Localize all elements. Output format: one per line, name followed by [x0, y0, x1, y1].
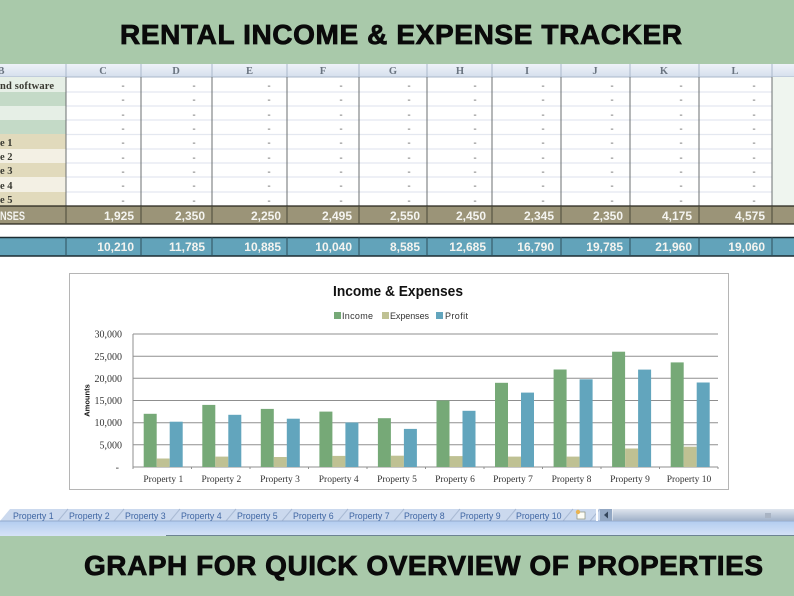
column headers: K: [660, 66, 669, 77]
x axis labels: Property 4: [319, 475, 359, 485]
column headers: I: [525, 66, 529, 77]
row label column: e 1: [0, 138, 13, 149]
chart legend: [334, 311, 468, 321]
sheet tab strip: Property 3: [125, 511, 166, 521]
profit row: 11,785: [169, 240, 205, 254]
column headers: L: [731, 66, 739, 77]
x axis labels: Property 8: [552, 475, 592, 485]
row label column: e 5: [0, 195, 13, 206]
total expenses row: [0, 206, 794, 224]
profit row: 19,785: [586, 240, 623, 254]
column headers: E: [246, 66, 253, 77]
profit bars: [170, 370, 710, 467]
spreadsheet table: [0, 64, 794, 256]
y axis title: Amounts: [82, 384, 92, 417]
x axis labels: Property 2: [201, 475, 242, 485]
y axis labels: 25,000: [94, 352, 122, 363]
sheet tab strip: Property 6: [293, 511, 334, 521]
data cells with dashes: ----------: [121, 110, 756, 121]
y axis labels: -: [116, 462, 119, 474]
chart: income and expenses: [70, 274, 728, 490]
expense bars: [157, 447, 697, 467]
scrollbar: [596, 509, 794, 521]
y axis labels: 15,000: [94, 396, 122, 407]
column headers: F: [320, 66, 326, 77]
x axis labels: Property 7: [493, 475, 533, 485]
data cells with dashes: [66, 77, 772, 207]
total expenses row: 2,250: [251, 209, 281, 223]
data cells with dashes: ----------: [121, 196, 756, 207]
profit row: 19,060: [728, 240, 765, 254]
total expenses row: 2,350: [175, 209, 205, 223]
profit row: 10,210: [97, 240, 134, 254]
profit row: 10,040: [315, 240, 352, 254]
x axis labels: Property 1: [143, 475, 183, 485]
chart legend: Profit: [445, 311, 468, 321]
chart title: Income & Expenses: [333, 283, 463, 300]
sheet tab strip: Property 9: [460, 511, 501, 521]
top title band: [0, 0, 794, 64]
income bars: [144, 352, 684, 467]
profit row: 12,685: [449, 240, 486, 254]
column headers: G: [389, 66, 397, 77]
y axis labels: 30,000: [94, 330, 122, 340]
column headers: C: [99, 66, 107, 77]
top title band: RENTAL INCOME & EXPENSE TRACKER: [120, 19, 682, 50]
total expenses row: 2,350: [593, 209, 623, 223]
total expenses row: 2,345: [524, 209, 554, 223]
row label column: e 3: [0, 166, 13, 177]
x axis labels: Property 6: [435, 475, 475, 485]
sheet tab strip: Property 4: [181, 511, 222, 521]
row label column: [0, 77, 66, 206]
y axis labels: 10,000: [94, 418, 122, 429]
sheet tab strip: Property 8: [404, 511, 445, 521]
bottom caption band: [0, 536, 794, 596]
bottom caption band: GRAPH FOR QUICK OVERVIEW OF PROPERTIES: [84, 550, 763, 581]
sheet tab strip: Property 10: [516, 511, 562, 521]
x axis labels: Property 10: [667, 475, 712, 485]
right side pale column: [772, 77, 794, 206]
row label column: nd software: [0, 81, 54, 92]
x axis labels: Property 5: [377, 475, 417, 485]
x axis labels: Property 9: [610, 475, 650, 485]
data cells with dashes: ----------: [121, 81, 756, 92]
data cells with dashes: ----------: [121, 95, 756, 106]
total expenses row: 2,450: [456, 209, 486, 223]
row label column: e 2: [0, 152, 13, 163]
chart legend: Income: [342, 311, 373, 321]
column headers: J: [592, 66, 598, 77]
row label column: e 4: [0, 181, 13, 192]
total expenses row: 2,550: [390, 209, 420, 223]
y axis labels: [94, 330, 122, 474]
data cells with dashes: ----------: [121, 167, 756, 178]
sheet tab strip: Property 2: [69, 511, 110, 521]
sheet tab strip: Property 1: [13, 511, 54, 521]
total expenses row: 4,575: [735, 209, 765, 223]
data cells with dashes: ----------: [121, 138, 756, 149]
y axis labels: 5,000: [100, 440, 122, 452]
total expenses row: 4,175: [662, 209, 692, 223]
total expenses row: 1,925: [104, 209, 134, 223]
column headers: D: [172, 66, 180, 77]
column headers: [0, 64, 794, 77]
column headers: H: [456, 66, 464, 77]
data cells with dashes: ----------: [121, 124, 756, 135]
data cells with dashes: ----------: [121, 181, 756, 192]
sheet tab strip: Property 7: [349, 511, 390, 521]
sheet tab strip: [0, 509, 794, 536]
sheet tab strip: Property 5: [237, 511, 278, 521]
y axis labels: 20,000: [94, 374, 122, 385]
profit row: [0, 237, 794, 256]
total expenses row: NSES: [0, 209, 25, 223]
x axis labels: Property 3: [260, 475, 300, 485]
icon: new sheet tab: [576, 510, 585, 519]
profit row: 16,790: [517, 240, 554, 254]
total expenses row: 2,495: [322, 209, 352, 223]
profit row: 10,885: [244, 240, 281, 254]
profit row: 8,585: [390, 240, 420, 254]
x axis labels: [143, 475, 712, 485]
profit row: 21,960: [655, 240, 692, 254]
chart legend: Expenses: [390, 311, 430, 321]
data cells with dashes: ----------: [121, 153, 756, 164]
